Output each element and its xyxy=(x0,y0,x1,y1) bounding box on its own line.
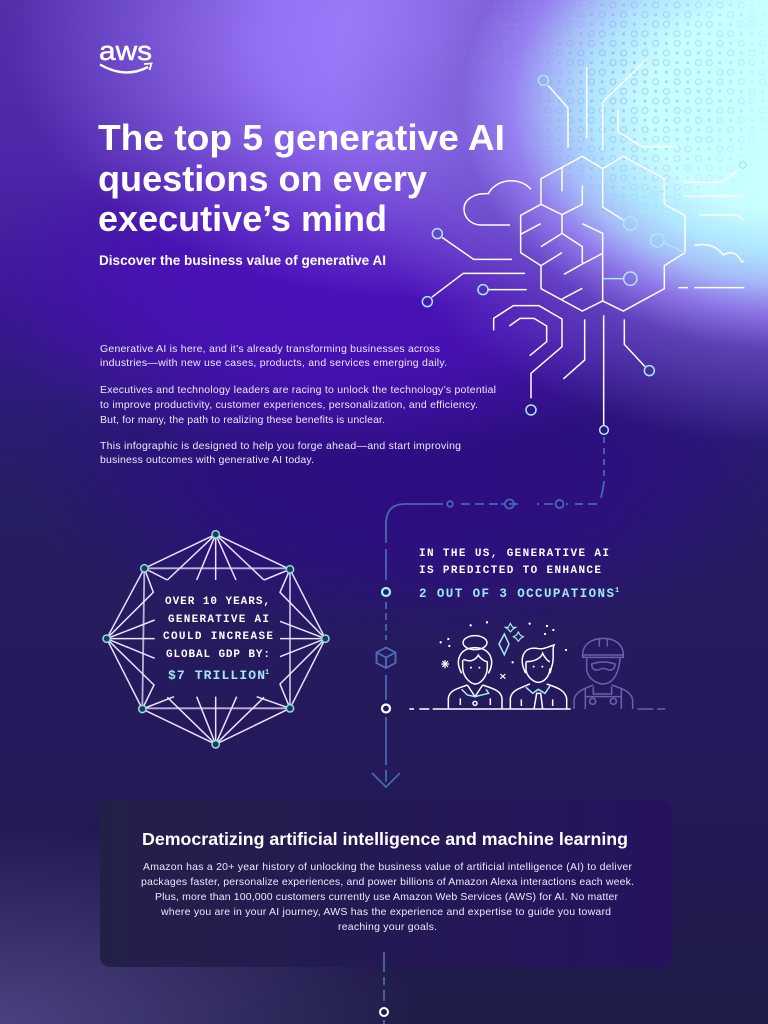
panel text: Amazon has a 20+ year history of unlocking the business value of artificial intelligence (AI) to deliver xyxy=(143,861,632,873)
question mark circuits xyxy=(494,306,562,398)
right circuits xyxy=(678,167,744,288)
GDP stat text: COULD INCREASE xyxy=(163,631,273,643)
inner square xyxy=(142,568,290,708)
man xyxy=(510,645,567,709)
occupations stat text: 1 xyxy=(615,587,619,595)
logo: aws: aws xyxy=(99,36,152,66)
icon: cube xyxy=(376,648,396,668)
GDP stat text xyxy=(163,596,273,683)
left circuits xyxy=(432,237,527,297)
intro text: Generative AI is here, and it’s already transforming businesses across xyxy=(100,343,440,355)
panel text: where you are in your AI journey, AWS has the experience and expertise to guide you toward xyxy=(160,906,611,918)
title: The top 5 generative AI xyxy=(98,117,505,158)
worker xyxy=(574,638,633,709)
spokes xyxy=(107,534,325,744)
GDP stat text: GLOBAL GDP BY: xyxy=(166,649,270,661)
bottom circuits xyxy=(563,315,645,426)
left cloud xyxy=(464,181,531,225)
intro text: This infographic is designed to help you forge ahead—and start improving xyxy=(100,440,461,452)
panel: democratizing AI xyxy=(100,800,672,967)
brain outline xyxy=(521,156,685,311)
title: executive’s mind xyxy=(98,198,387,239)
brain nodes xyxy=(603,185,685,285)
occupations stat text: 2 OUT OF 3 OCCUPATIONS xyxy=(419,587,614,601)
path nodes xyxy=(382,588,390,712)
octagon network xyxy=(103,531,329,748)
occupations stat text xyxy=(419,548,619,601)
intro text: to improve productivity, customer experiences, personalization, and efficiency. xyxy=(100,399,478,411)
occupations stat text: IN THE US, GENERATIVE AI xyxy=(419,548,609,560)
woman xyxy=(448,636,502,709)
panel heading: Democratizing artificial intelligence and machine learning xyxy=(142,829,628,849)
panel text: reaching your goals. xyxy=(338,921,437,933)
panel text xyxy=(141,861,634,933)
panel text: packages faster, personalize experiences, and power billions of Amazon Alexa interactions each week. xyxy=(141,876,634,888)
top circuits xyxy=(548,60,678,150)
GDP stat text: 1 xyxy=(265,669,269,677)
GDP stat text: GENERATIVE AI xyxy=(168,614,269,626)
dashed connector xyxy=(372,437,604,787)
sparkles xyxy=(439,621,567,679)
subtitle: Discover the business value of generative AI xyxy=(99,253,386,268)
intro text: industries—with new use cases, products, and services emerging daily. xyxy=(100,357,447,369)
intro text: But, for many, the path to realizing these benefits is unclear. xyxy=(100,414,385,426)
title xyxy=(98,117,505,239)
intro text: business outcomes with generative AI today. xyxy=(100,454,314,466)
title: questions on every xyxy=(98,158,427,199)
GDP stat text: $7 TRILLION xyxy=(168,668,265,683)
lower connector xyxy=(380,952,388,1024)
outer octagon xyxy=(107,534,325,744)
panel text: Plus, more than 100,000 customers currently use Amazon Web Services (AWS) for AI. No matter xyxy=(155,891,618,903)
brain inner lines xyxy=(521,168,623,301)
brain circuit illustration xyxy=(422,60,746,434)
occupations stat text: IS PREDICTED TO ENHANCE xyxy=(419,565,601,577)
baseline xyxy=(409,707,571,711)
nodes xyxy=(103,531,329,748)
intro text: Executives and technology leaders are racing to unlock the technology’s potential xyxy=(100,384,496,396)
dot pattern xyxy=(492,2,766,214)
people illustration xyxy=(409,621,665,709)
intro text xyxy=(100,343,496,466)
GDP stat text: OVER 10 YEARS, xyxy=(165,596,270,608)
